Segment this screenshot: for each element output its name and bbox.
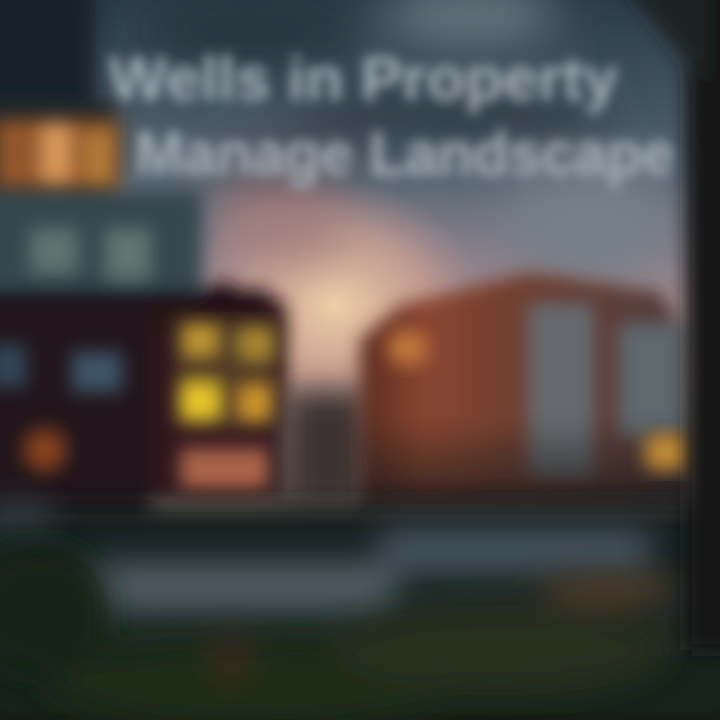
dark tree on right (620, 0, 720, 650)
title text (blurred): Wells in Property (108, 45, 619, 114)
lower left lamp (23, 428, 67, 472)
blue mid windows (0, 228, 151, 392)
ground and path (0, 505, 720, 720)
foreground foliage (0, 545, 680, 720)
centre distant buildings (285, 390, 370, 510)
yellow windows (175, 318, 280, 490)
orange upper windows (0, 120, 120, 188)
right lamp (645, 434, 695, 470)
title text (blurred) (108, 45, 675, 189)
left building (0, 0, 290, 525)
title text (blurred): Manage Landscape (135, 120, 675, 189)
right building (360, 272, 695, 515)
